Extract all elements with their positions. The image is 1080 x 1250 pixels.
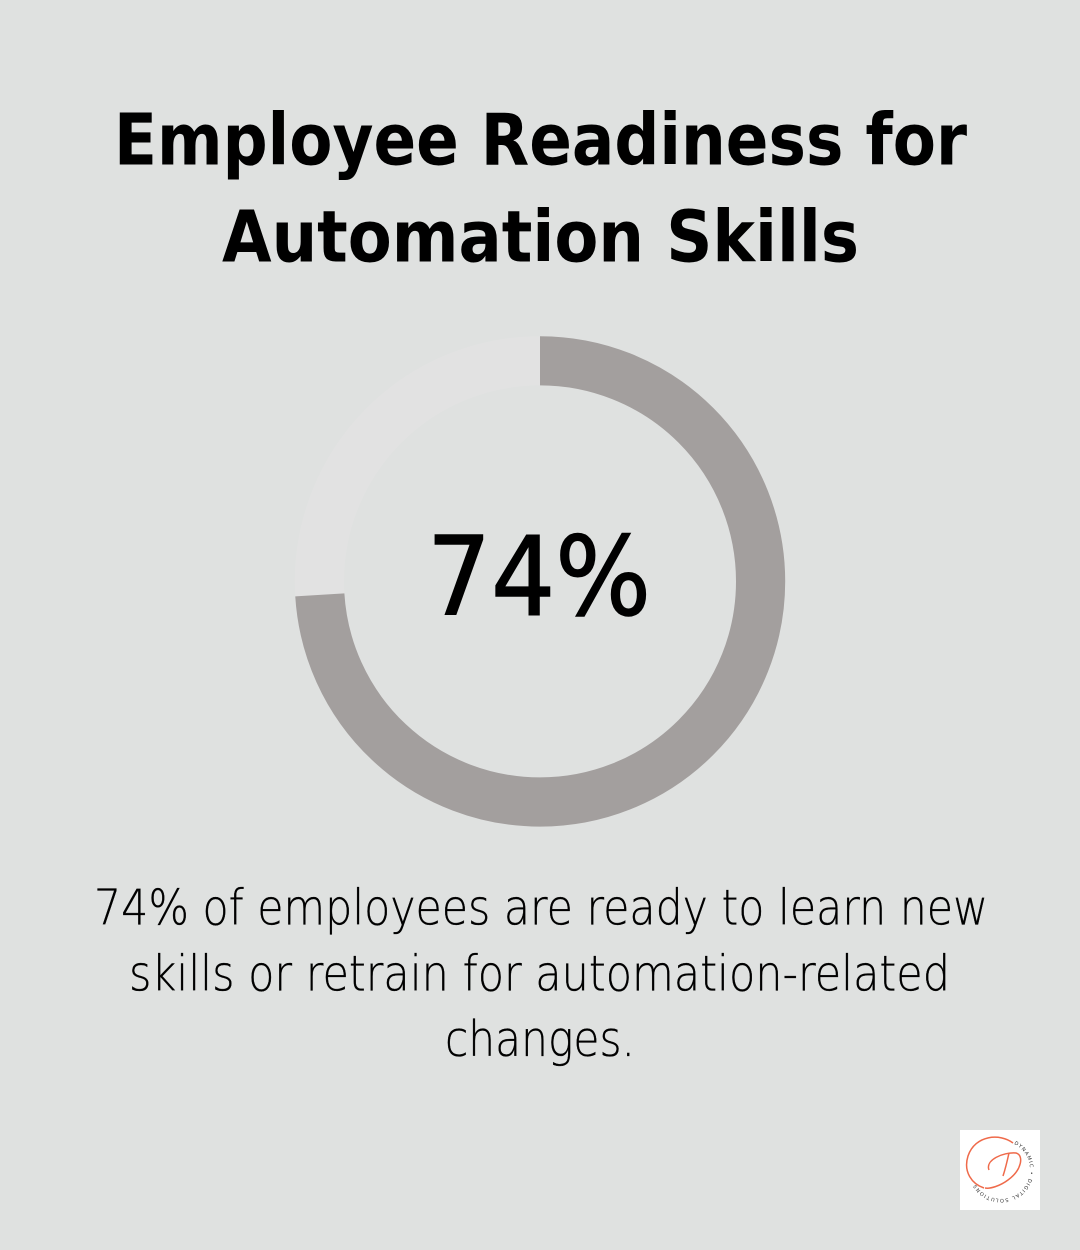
- title: [114, 98, 967, 279]
- description text: [94, 880, 988, 1068]
- title: Automation Skills: [222, 196, 859, 279]
- title: Employee Readiness for: [114, 98, 967, 181]
- donut chart: 74%: [319, 361, 761, 802]
- description text: skills or retrain for automation-related: [129, 945, 950, 1002]
- logo: Dynamic Digital Solutions: [960, 1130, 1040, 1210]
- description text: changes.: [445, 1011, 635, 1068]
- donut value: 74%: [427, 513, 651, 640]
- logo: Dynamic Digital Solutions: DYNAMIC • DIGITAL SOLUTIONS: [973, 1141, 1034, 1203]
